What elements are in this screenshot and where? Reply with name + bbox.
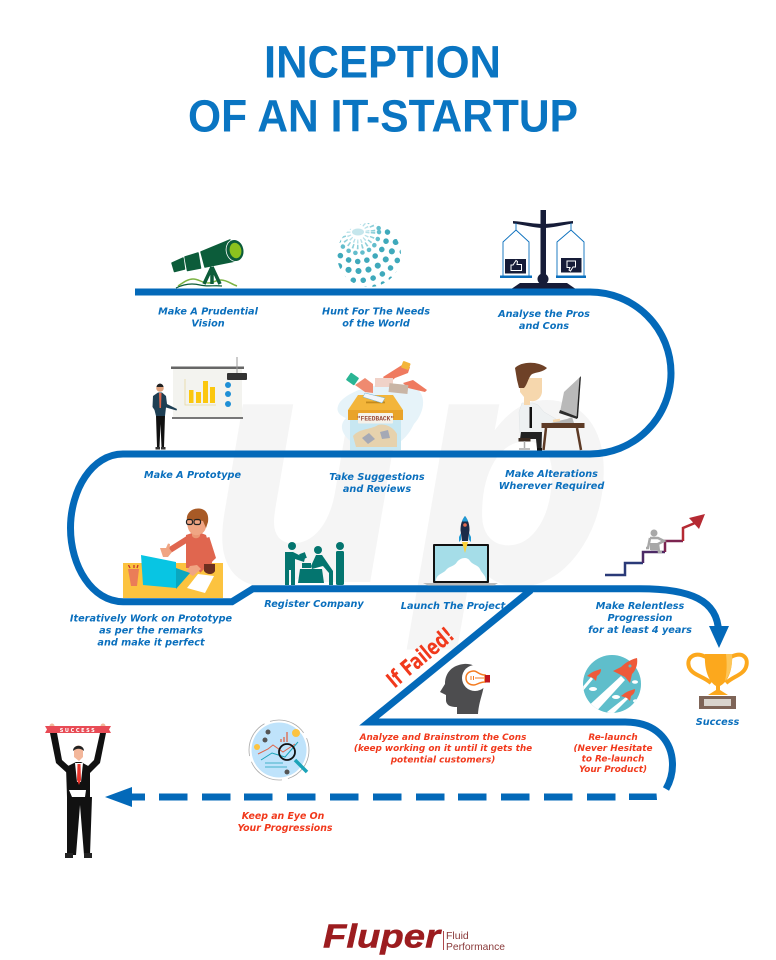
icon: man at computer [515,363,584,450]
step: hunt for the needs [322,223,430,326]
icon: dotted globe [338,223,401,287]
step: launch the project [401,516,506,612]
logo: fluper: Performance [446,941,505,953]
icon: man holding success banner: SUCCESS [60,728,96,734]
label: make a prudential vision: Vision [191,318,225,330]
icon: climbing stairs [605,514,705,575]
label: analyze and brainstorm the cons: (keep working on it until it gets the [354,744,532,754]
step: analyze and brainstorm [354,664,532,766]
step: success trophy [688,654,747,728]
icon: feedback box: "FEEDBACK" [357,416,394,422]
icon: magnifier over charts [249,720,309,780]
icon: three people at table [285,542,344,585]
icon: trophy [688,654,747,709]
title [188,36,578,142]
icon: rockets in circle [580,655,641,715]
step: keep an eye [238,720,333,834]
label: make relentless progression: for at least 4 years [588,625,692,636]
logo: fluper: Fluid [446,930,469,942]
label: re-launch: Re-launch [588,733,638,743]
icon: telescope [172,238,246,288]
dashed return road [105,787,657,807]
label: re-launch: to Re-launch [582,754,644,764]
label: launch the project: Launch The Project [401,601,506,612]
title: INCEPTION [264,36,501,88]
label: re-launch: Your Product) [579,765,647,775]
step: prototype [144,357,247,481]
icon: worker at desk [123,508,223,598]
label: make relentless progression: Progression [608,613,673,624]
label: hunt for the needs of the world: of the World [342,318,411,330]
label: success: Success [696,717,739,728]
step: re-launch [573,655,653,775]
step: prudential vision [158,238,259,330]
label: iteratively work on prototype: and make it perfect [97,638,205,648]
callout: if failed: If Failed! [382,623,460,693]
watermark: up: up [205,280,615,659]
step: relentless progression [588,514,705,636]
label: make a prudential vision: Make A Prudential [158,306,259,318]
icon: balance scale [500,210,586,288]
step: alterations [499,363,605,492]
failure road path [369,590,672,789]
label: make alterations wherever required: Make Alterations [505,469,598,480]
logo: fluper [323,918,505,954]
label: analyse the pros and cons: and Cons [519,321,569,332]
logo: fluper: Fluper [323,918,442,954]
label: take suggestions and reviews: and Reviews [343,484,411,495]
label: take suggestions and reviews: Take Suggestions [329,472,425,483]
step: pros and cons [497,210,590,332]
icon: presenter and board [152,357,247,450]
label: analyze and brainstorm the cons: Analyze and Brainstrom the Cons [359,733,526,743]
label: register company: Register Company [264,599,364,610]
step: register company [264,542,364,610]
icon: laptop with rocket [423,516,498,586]
label: hunt for the needs of the world: Hunt For The Needs [322,306,430,318]
icon: man holding success banner [45,724,111,858]
label: make relentless progression: Make Relentless [596,601,685,612]
main road path [70,292,718,632]
label: iteratively work on prototype: as per the remarks [99,626,203,636]
label: re-launch: (Never Hesitate [573,744,653,754]
title: OF AN IT-STARTUP [188,91,578,142]
arrow head: to success [709,626,729,648]
icon: head with light bulb [440,664,490,714]
label: analyze and brainstorm the cons: potential customers) [390,756,495,766]
label: keep an eye on your progressions: Your Progressions [238,823,333,834]
step: suggestions and reviews [329,361,427,495]
label: keep an eye on your progressions: Keep an Eye On [242,811,325,822]
label: make alterations wherever required: Wherever Required [499,481,605,492]
step: iterate on prototype [70,508,233,648]
label: iteratively work on prototype: Iteratively Work on Prototype [70,614,233,624]
label: make a prototype: Make A Prototype [144,470,241,481]
label: analyse the pros and cons: Analyse the Pros [497,309,590,320]
